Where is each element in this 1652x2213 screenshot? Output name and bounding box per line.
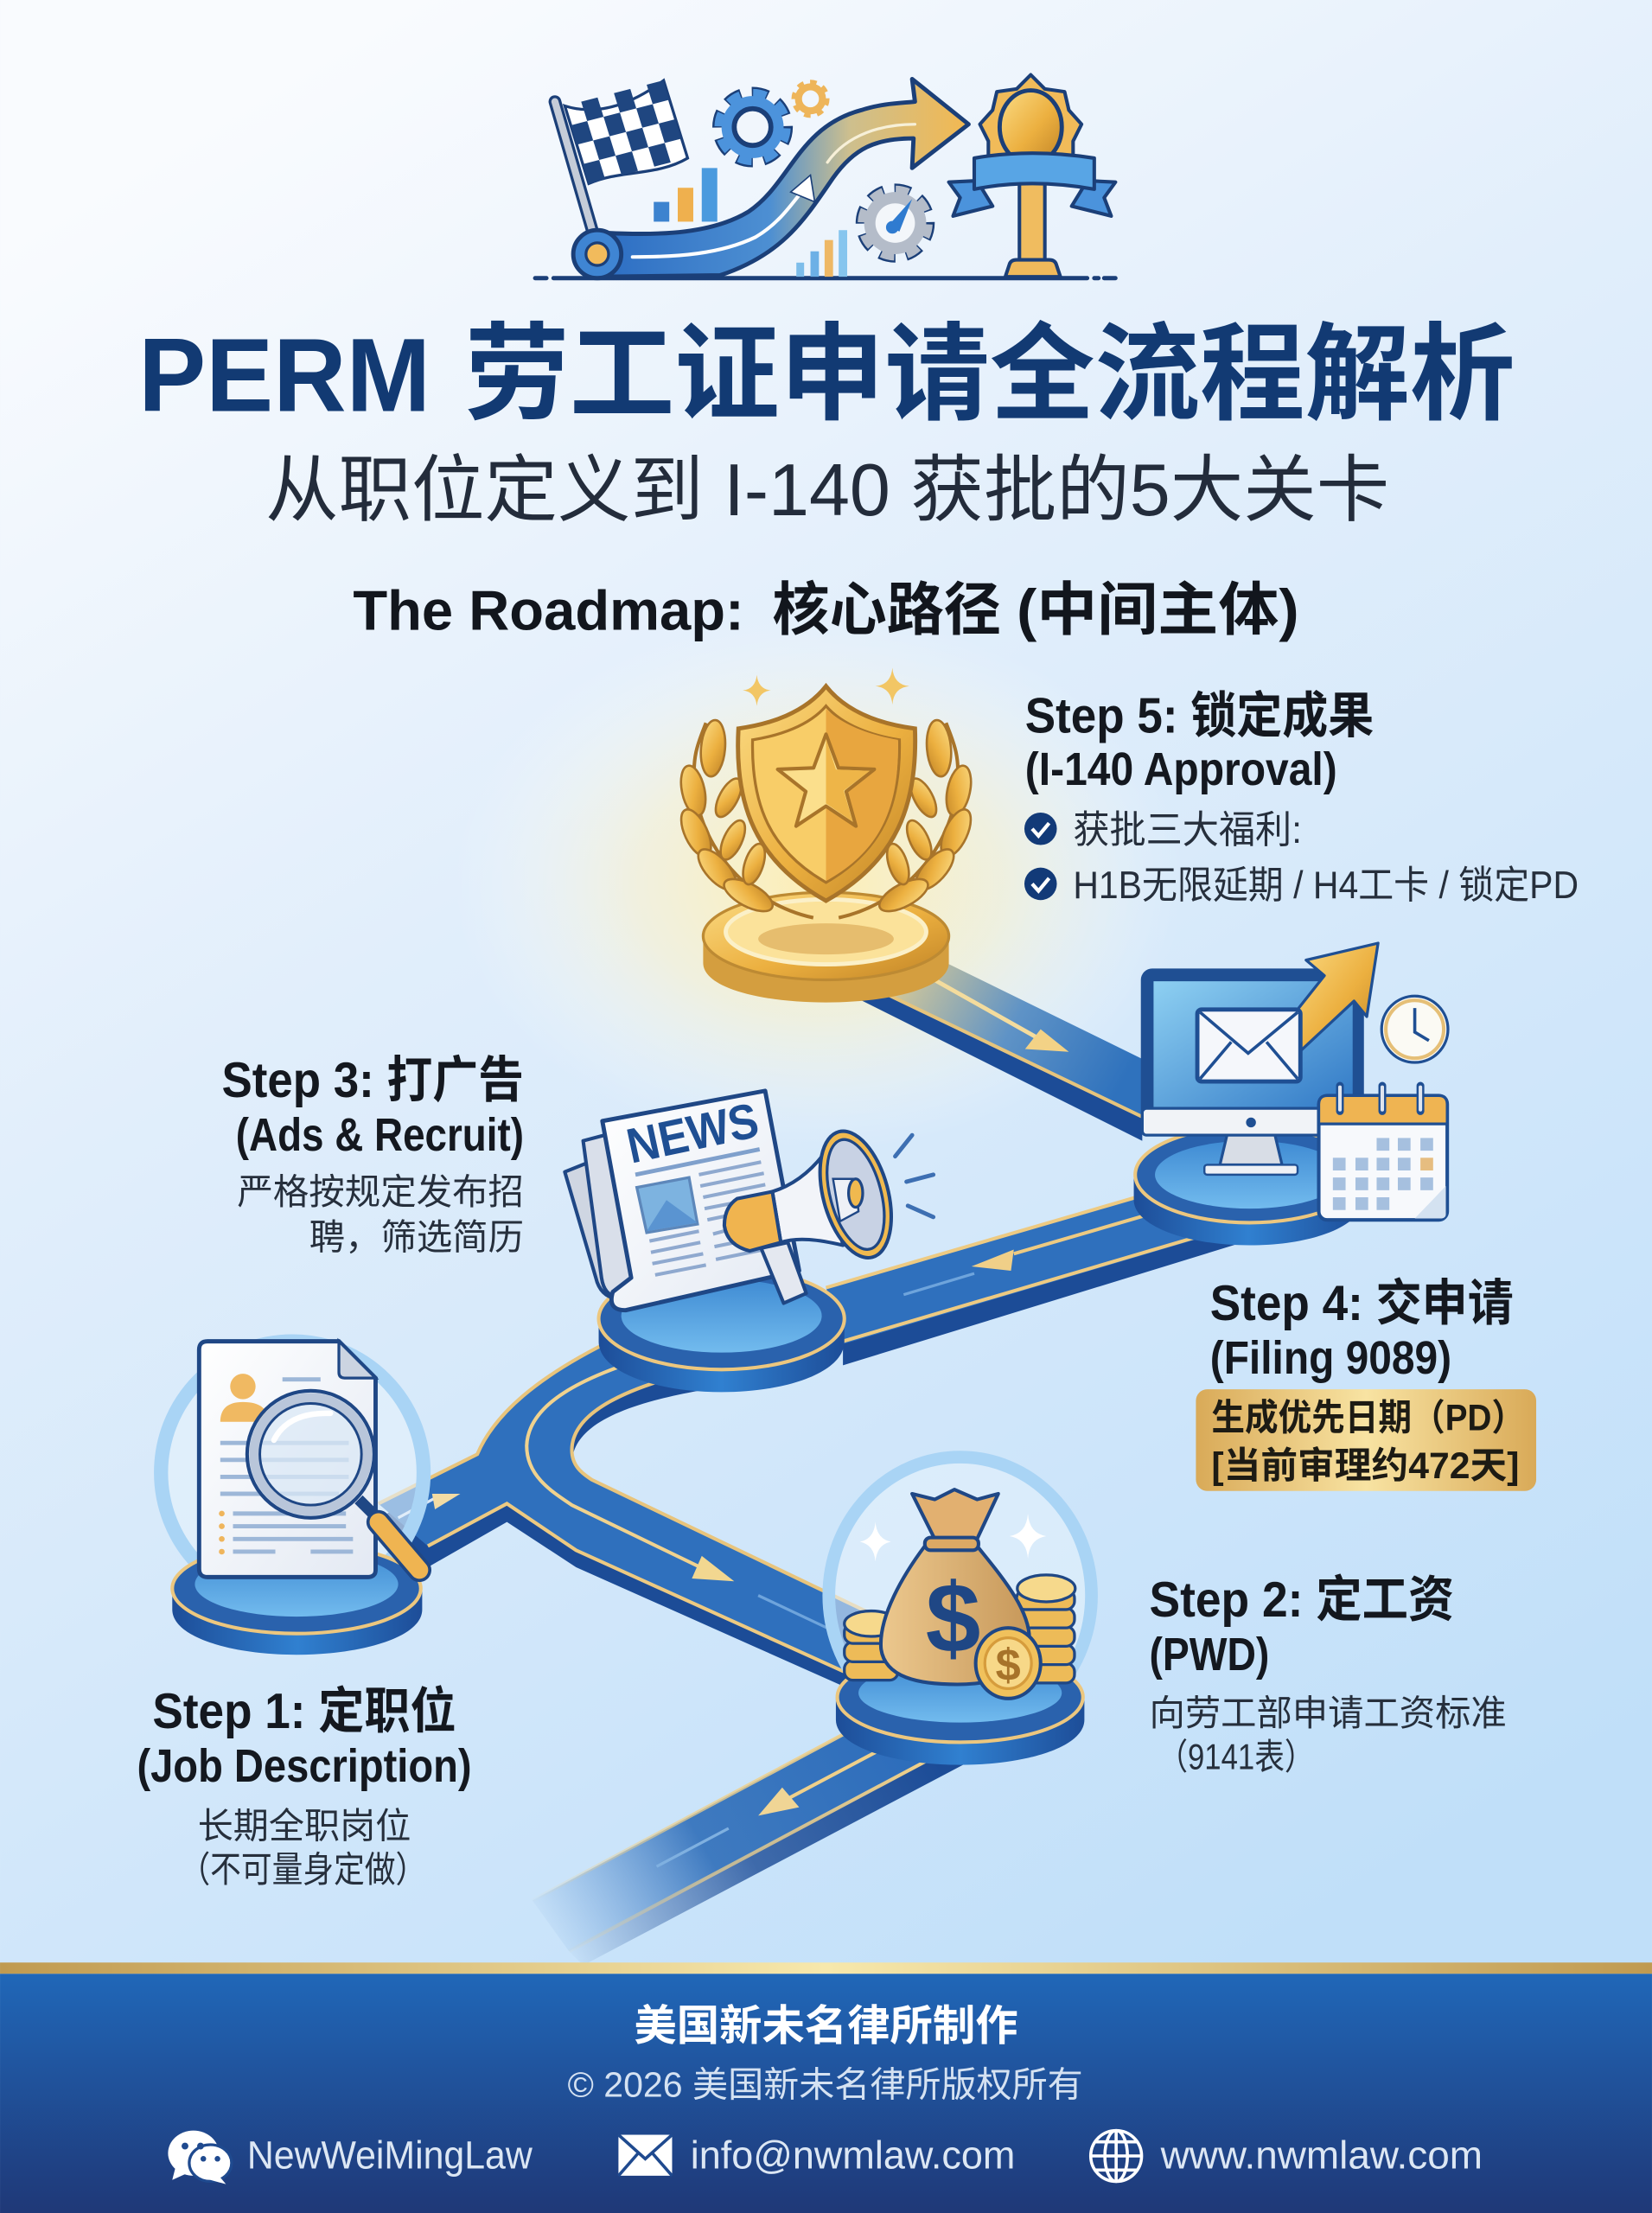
icon: mail [618,2135,672,2176]
step 1 text: (Job Description) [137,1740,472,1792]
footer background [0,1974,1652,2213]
footer [0,1962,1652,2213]
glow behind shield [452,614,1186,1151]
logo s-curve arrow [573,79,968,278]
laurel left [675,719,813,918]
front coin: $ [996,1641,1021,1691]
platform: step 1 [172,1543,422,1655]
icon: newspaper and megaphone [564,1091,934,1311]
platform: step 2 [836,1652,1084,1765]
icon: resume and magnifier [199,1342,419,1577]
step 3 text [221,1053,524,1257]
step 5 text: H1B无限延期 / H4工卡 / 锁定PD [1073,864,1579,907]
section heading: (中间主体) [1017,577,1299,642]
calendar [1319,1086,1447,1220]
road: step 2 fading exit [533,1723,963,1966]
step 5 text: 获批三大福利: [1073,809,1302,851]
logo blue gear [722,96,784,158]
step 2 text: (PWD) [1150,1629,1269,1680]
top logo: roadmap banner [535,75,1115,278]
step 2 text: （9141表） [1158,1736,1315,1776]
title: PERM [138,316,431,433]
icon: money bag and coins: $ [926,1564,980,1674]
platform: step 4 [1134,1126,1364,1246]
newspaper [564,1091,799,1311]
footer heading: 美国新未名律所制作 [634,2003,1018,2050]
email: info@nwmlaw.com [691,2133,1015,2178]
step 5 text [1024,689,1579,907]
step 4 text: (Filing 9089) [1210,1332,1451,1384]
logo medal trophy [949,75,1115,277]
halo: step 2 [829,1457,1092,1734]
footer gold band [0,1962,1652,1974]
step 1 text: （不可量身定做） [179,1849,426,1890]
front coin [976,1628,1041,1699]
icon: globe [1091,2131,1142,2181]
road: step 5 to step 4 [860,954,1142,1141]
step 3 text: 聘，筛选简历 [309,1216,524,1257]
road: step 1 junction to step 2 and step 3 [379,1320,903,1694]
check bullet 1 [1024,813,1057,845]
step 2 text [1150,1572,1507,1776]
step 4 text [1196,1276,1536,1491]
megaphone [724,1123,934,1304]
clock [1381,996,1448,1062]
logo gauge gear [864,192,926,254]
step 5 text: (I-140 Approval) [1025,743,1337,795]
icon: money bag and coins [845,1489,1075,1699]
logo baseline [535,277,1115,279]
step 1 text: Step 1: 定职位 [152,1684,456,1739]
step 2 text: Step 2: 定工资 [1150,1572,1454,1628]
section heading [353,577,1299,642]
subtitle: 从职位定义到 I-140 获批的5大关卡 [265,449,1389,531]
logo checkered flag [555,80,687,233]
callout: priority date [1196,1389,1536,1491]
arrow up [1292,943,1378,1059]
halo: step 1 [161,1342,424,1604]
icon: wechat [168,2131,232,2184]
check bullet 2 [1024,868,1057,900]
right coin stack [1017,1575,1075,1683]
laurel right [839,719,977,918]
footer copyright: © 2026 美国新未名律所版权所有 [568,2064,1083,2104]
logo rising bars [654,168,847,277]
step 5 text: Step 5: 锁定成果 [1025,689,1374,744]
newspaper: NEWS [622,1093,763,1175]
step 3 text: Step 3: 打广告 [221,1053,524,1108]
section heading: The Roadmap: [353,578,744,641]
section heading: 核心路径 [772,577,1001,642]
envelope [1197,1010,1300,1081]
left coin stack [845,1611,898,1680]
platform: step 5 gold [703,892,949,1003]
bag [881,1546,1030,1685]
magnifier [247,1391,419,1570]
logo gold gear [795,84,826,113]
wechat id: NewWeiMingLaw [247,2133,533,2178]
road: step 4 to step 3 [826,1193,1242,1365]
step 3 text: (Ads & Recruit) [236,1109,524,1161]
title: 劳工证申请全流程解析 [464,315,1515,433]
icon: monitor with envelope, arrow, clock, calendar [1141,943,1448,1220]
website: www.nwmlaw.com [1160,2133,1483,2178]
callout: priority date: 生成优先日期（PD） [1211,1398,1525,1438]
step 3 text: 严格按规定发布招 [237,1171,524,1212]
icon: gold shield with laurels [675,668,977,918]
step 4 text: Step 4: 交申请 [1210,1276,1514,1331]
step 2 text: 向劳工部申请工资标准 [1150,1693,1507,1733]
sparkles [860,1514,1046,1561]
sparkles [743,668,909,706]
platform: step 3 [599,1268,845,1392]
step 1 text: 长期全职岗位 [198,1806,411,1846]
callout: priority date: [当前审理约472天] [1211,1445,1519,1486]
step 1 text [137,1684,472,1890]
